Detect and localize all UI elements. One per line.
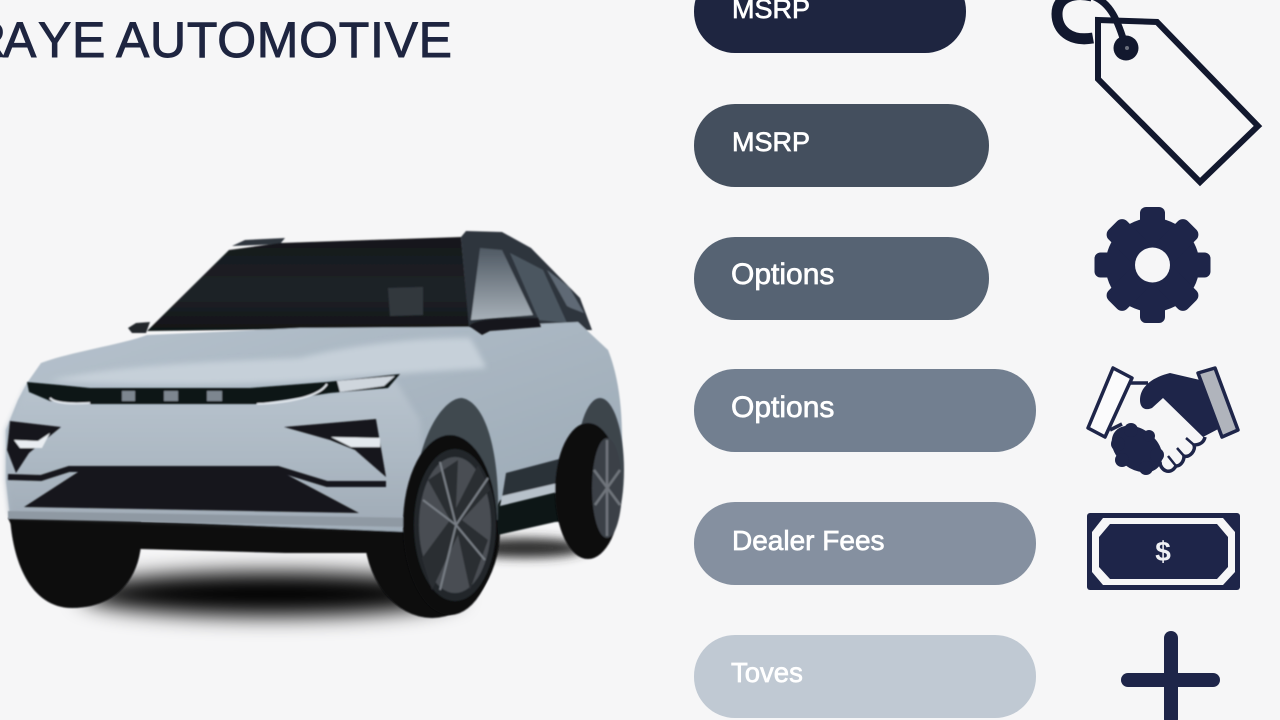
rear wheel xyxy=(555,398,624,559)
icon: gear xyxy=(1094,207,1210,323)
pill: Options mid xyxy=(694,369,1036,452)
lower grille xyxy=(24,472,359,513)
icon: plus xyxy=(1121,631,1220,720)
side door lower dark panel xyxy=(502,458,584,498)
icon: handshake xyxy=(1088,368,1238,482)
icon: price tag xyxy=(1057,0,1258,182)
roof rails and pillars xyxy=(232,231,592,332)
car body xyxy=(6,322,622,532)
icon: dollar bill: $ xyxy=(1155,536,1171,567)
side skirt xyxy=(500,476,590,506)
pill: Options mid: Options xyxy=(731,391,834,424)
windshield xyxy=(147,237,469,331)
headlight strip xyxy=(27,374,400,404)
grille outline xyxy=(8,469,386,484)
side windows xyxy=(471,248,584,323)
title: AUTOMOTIVE xyxy=(116,12,452,68)
front tire inner sidewall xyxy=(364,442,500,618)
pill: Dealer Fees: Dealer Fees xyxy=(732,525,885,556)
pill: MSRP dark xyxy=(694,0,966,53)
pill: MSRP slate: MSRP xyxy=(732,127,810,157)
pill: MSRP slate xyxy=(694,104,989,187)
pill: Options slate: Options xyxy=(731,258,834,291)
pill: Toves xyxy=(694,635,1036,718)
left fog light xyxy=(7,421,61,473)
pill: Toves: Toves xyxy=(731,657,803,688)
pill: Options slate xyxy=(694,237,989,320)
ground shadow xyxy=(80,538,587,616)
mirrors xyxy=(469,318,541,335)
front fascia shading xyxy=(6,380,425,528)
bumper strip xyxy=(8,511,412,527)
lower dark sill xyxy=(8,518,420,553)
icon: dollar bill xyxy=(1087,513,1240,590)
hood highlight xyxy=(50,338,486,384)
front wheel xyxy=(403,398,498,615)
front left tire xyxy=(10,515,141,608)
right fog light xyxy=(284,419,386,477)
pill: Dealer Fees xyxy=(694,502,1036,585)
car illustration xyxy=(6,231,624,618)
